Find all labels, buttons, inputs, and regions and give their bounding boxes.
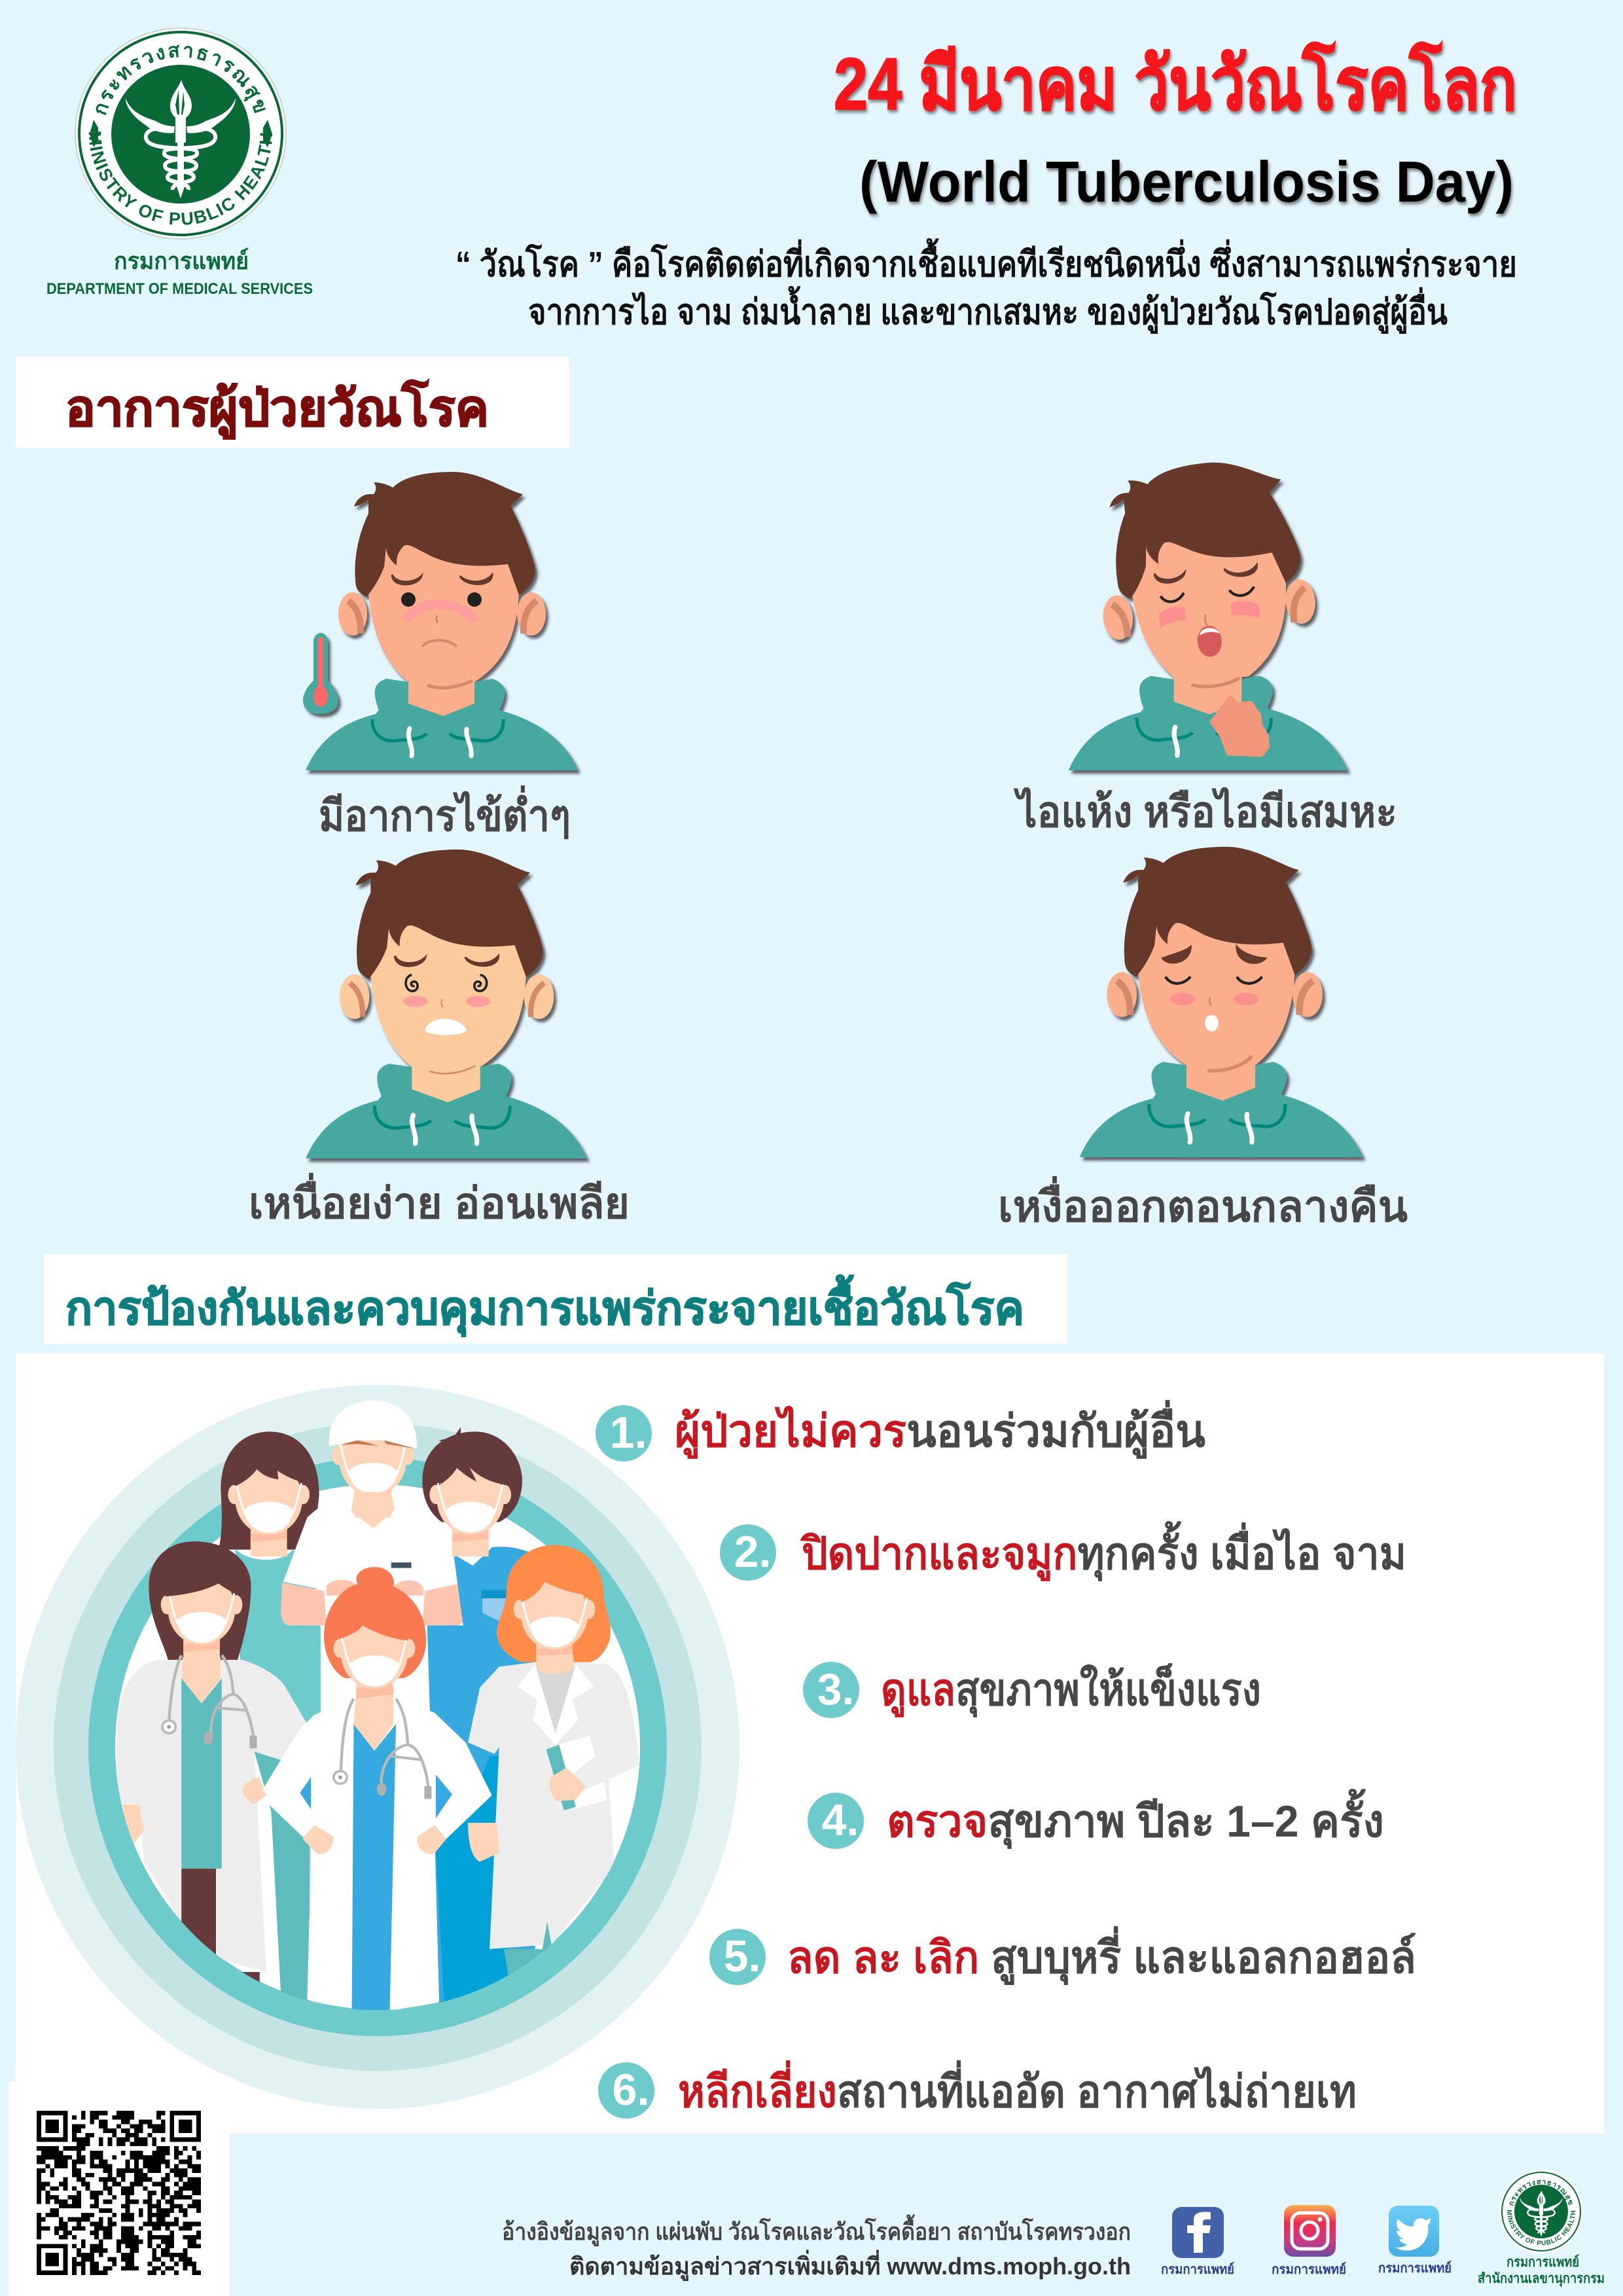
illustration: medical team in concentric circles [16,1385,740,2109]
label: twitter: กรมการแพทย์ [1378,2261,1452,2276]
step 6: 6. [613,2065,649,2115]
icon: instagram [1284,2205,1336,2257]
symptom: night sweats boy [1080,847,1363,1157]
person: left doctor [115,1541,323,2004]
person: top surgeon [281,1401,465,1626]
heading: symptoms [16,357,569,448]
logo: small seal: กระทรวงสาธารณสุข [1509,2179,1573,2206]
icon: hand on chest [1209,695,1270,757]
heading: symptoms: อาการผู้ป่วยวัณโรค [65,379,489,439]
symptom: tired boy [306,850,587,1158]
subtitle: World Tuberculosis Day: (World Tuberculosis Day) [859,149,1514,214]
step 6: หลีกเลี่ยงสถานที่แออัด อากาศไม่ถ่ายเท [678,2060,1357,2117]
step 5: ลด ละ เลิก สูบบุหรี่ และแอลกอฮอล์ [787,1926,1416,1986]
footer: reference text: อ้างอิงข้อมูลจาก แผ่นพับ วัณโรคและวัณโรคดื้อยา สถาบันโรคทรวงอก [502,2214,1131,2247]
logo: Ministry of Public Health seal: กระทรวงสาธารณสุข [96,45,266,115]
person: centre doctor [242,1567,492,2011]
logo caption: department name Thai: กรมการแพทย์ [114,247,249,274]
icon: twitter [1389,2206,1439,2257]
footer: website: ติดตามข้อมูลข่าวสารเพิ่มเติมที่ www.dms.moph.go.th [569,2250,1131,2282]
step 1: 1. [610,1408,647,1458]
step 2 [720,1520,1406,1582]
icon: facebook [1172,2207,1224,2258]
person: back right doctor [422,1427,535,2004]
label: instagram: กรมการแพทย์ [1272,2262,1346,2277]
logo: Ministry of Public Health seal [75,27,287,240]
heading: prevention: การป้องกันและควบคุมการแพร่กระจายเชื้อวัณโรค [65,1274,1024,1337]
label: dry cough: ไอแห้ง หรือไอมีเสมหะ [1013,787,1397,836]
step 2: ปิดปากและจมูกทุกครั้ง เมื่อไอ จาม [800,1520,1406,1582]
logo caption: department name English: DEPARTMENT OF MEDICAL SERVICES [46,280,313,298]
logo: Ministry of Public Health seal: MINISTRY OF PUBLIC HEALTH [89,132,272,225]
footer: department label: กรมการแพทย์ [1507,2254,1579,2270]
panel: prevention [16,1354,1604,2134]
step 3 [803,1662,1261,1718]
heading: prevention [44,1254,1067,1344]
step 3: ดูแลสุขภาพให้แข็งแรง [881,1663,1261,1718]
step 4: 4. [822,1795,859,1845]
step 3: 3. [817,1664,854,1714]
label: night sweats: เหงื่อออกตอนกลางคืน [998,1175,1408,1230]
symptom: coughing boy [1069,454,1347,770]
step 4 [808,1788,1384,1849]
logo: small seal: MINISTRY OF PUBLIC HEALTH [1507,2210,1575,2245]
person: right doctor [435,1545,639,2002]
label: facebook: กรมการแพทย์ [1161,2262,1234,2277]
icon: thermometer [303,633,338,714]
logo: small seal [1499,2170,1583,2253]
step 5: 5. [724,1931,760,1981]
symptom: low fever boy [303,472,578,770]
footer: office label: สำนักงานเลขานุการกรม [1478,2271,1605,2287]
person: back left nurse [219,1431,321,1729]
step 4: ตรวจสุขภาพ ปีละ 1–2 ครั้ง [887,1788,1384,1849]
step 2: 2. [734,1527,771,1577]
label: tired and weak: เหนื่อยง่าย อ่อนเพลีย [249,1172,630,1227]
step 1: ผู้ป่วยไม่ควรนอนร่วมกับผู้อื่น [675,1399,1205,1460]
intro text line 2: จากการไอ จาม ถ่มน้ำลาย และขากเสมหะ ของผู้ป่วยวัณโรคปอดสู่ผู้อื่น [528,286,1448,334]
QR code [9,2082,230,2296]
label: low fever: มีอาการไข้ต่ำๆ [319,785,571,840]
step 1 [596,1399,1205,1462]
